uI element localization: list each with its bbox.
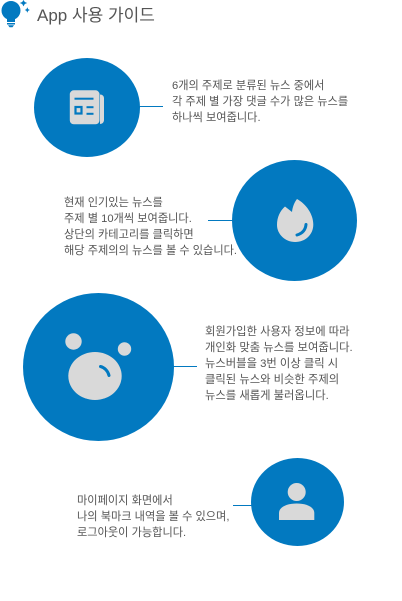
circle: my page — [251, 458, 344, 546]
text: news description: 각 주제 별 가장 댓글 수가 많은 뉴스를 — [172, 96, 348, 108]
icon: light bulb with sparkles — [2, 0, 30, 28]
connector line: recommendation — [173, 366, 197, 367]
text: popular description — [64, 196, 237, 257]
text: my page description: 나의 북마크 내역을 볼 수 있으며, — [77, 511, 229, 523]
text: news description — [172, 79, 348, 124]
text: recommendation description: 회원가입한 사용자 정보에 따라 — [205, 326, 350, 338]
title: App 사용 가이드 — [37, 6, 155, 25]
connector line: news — [134, 106, 163, 107]
circle: news — [34, 58, 140, 157]
text: my page description: 마이페이지 화면에서 — [77, 494, 173, 506]
text: popular description: 현재 인기있는 뉴스를 — [64, 197, 163, 209]
text: recommendation description: 뉴스버블을 3번 이상 클릭 시 — [205, 358, 338, 370]
icon: user — [279, 483, 314, 520]
text: news description: 하나씩 보여줍니다. — [172, 112, 261, 124]
text: recommendation description: 개인화 맞춤 뉴스를 보여줍니다. — [205, 342, 353, 354]
text: recommendation description: 클릭된 뉴스와 비슷한 주제의 — [205, 374, 339, 386]
connector line: my page — [233, 505, 253, 506]
connector line: popular — [208, 220, 234, 221]
panel: news section — [34, 58, 163, 157]
icon: news bubbles — [65, 333, 132, 400]
panel: my page section — [233, 458, 344, 546]
text: popular description: 해당 주제의의 뉴스를 볼 수 있습니다. — [64, 245, 237, 257]
icon: flame — [277, 199, 314, 242]
text: my page description: 로그아웃이 가능합니다. — [77, 527, 186, 539]
text: news description: 6개의 주제로 분류된 뉴스 중에서 — [172, 80, 324, 92]
icon: newspaper — [70, 90, 104, 124]
text: my page description — [77, 494, 229, 539]
panel: recommendation section — [23, 293, 197, 441]
text: popular description: 상단의 카테고리를 클릭하면 — [64, 229, 194, 241]
panel: popular section — [208, 160, 357, 281]
circle: popular — [232, 160, 357, 281]
text: popular description: 주제 별 10개씩 보여줍니다. — [64, 213, 192, 225]
circle: recommendation — [23, 293, 174, 441]
text: recommendation description — [205, 325, 353, 402]
text: recommendation description: 뉴스를 새롭게 불러옵니다. — [205, 390, 329, 402]
